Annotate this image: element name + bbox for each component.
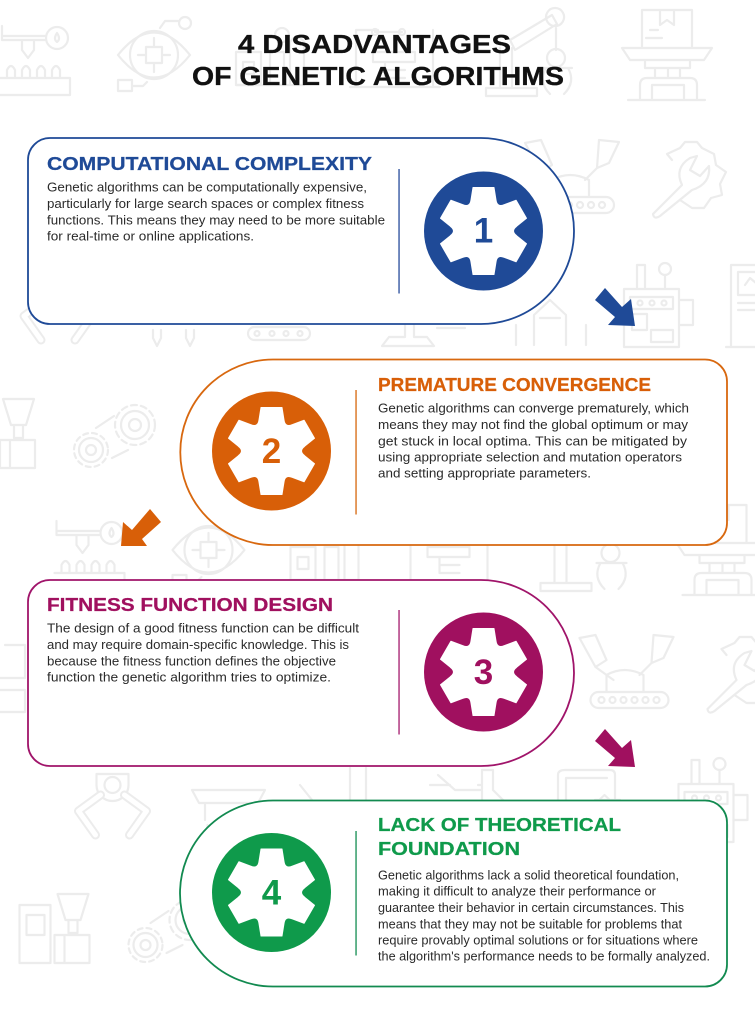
body text: the algorithm's performance needs to be formally analyzed. [378,948,710,964]
icon: numbered gear 3 [424,612,543,732]
body text: functions. This means they may need to be more suitable [47,212,385,228]
panel: lack of theoretical foundation [180,800,727,986]
title: OF GENETIC ALGORITHMS [192,63,564,91]
body text: means that they may not be suitable for problems that [378,916,682,932]
body text: because the fitness function defines the objective [47,654,336,668]
body text [378,868,710,964]
body text: using appropriate selection and mutation operators [378,450,683,464]
arrow: magenta down-right [595,729,635,767]
arrow: orange down-left [121,509,161,546]
body text: The design of a good fitness function can be difficult [47,620,359,636]
body text: for real-time or online applications. [47,228,254,244]
body text [47,180,385,244]
icon: numbered gear 4 [212,833,331,952]
arrow: blue down-right [595,288,635,326]
heading: PREMATURE CONVERGENCE [378,374,651,395]
body text: function the genetic algorithm tries to optimize. [47,670,331,684]
body text: particularly for large search spaces or complex fitness [47,196,365,211]
icon: numbered gear 4: 4 [262,874,282,912]
icon: numbered gear 2: 2 [262,432,281,471]
body text: guarantee their behavior in certain circumstances. This [378,900,684,915]
body text: making it difficult to analyze their performance or [378,884,657,898]
panel: computational complexity [28,138,574,324]
body text: and setting appropriate parameters. [378,466,591,480]
icon: numbered gear 1 [424,172,543,290]
body text: means they may not find the global optimum or may [378,417,689,432]
body text: Genetic algorithms can be computationally expensive, [47,180,367,194]
title [192,31,564,91]
body text: get stuck in local optima. This can be mitigated by [378,434,688,448]
body text [378,400,689,480]
heading: FITNESS FUNCTION DESIGN [47,594,333,615]
panel: fitness function design [28,580,574,766]
icon: numbered gear 3: 3 [474,653,493,692]
heading: FOUNDATION [378,838,520,859]
heading [378,814,621,859]
body text: require provably optimal solutions or for situations where [378,932,698,948]
icon: numbered gear 2 [212,392,331,510]
title: 4 DISADVANTAGES [238,31,511,59]
body text [47,620,359,684]
heading: COMPUTATIONAL COMPLEXITY [47,153,373,174]
body text: and may require domain-specific knowledge. This is [47,637,349,652]
heading: LACK OF THEORETICAL [378,814,621,835]
body text: Genetic algorithms can converge prematurely, which [378,400,689,416]
panel: premature convergence [180,360,727,545]
body text: Genetic algorithms lack a solid theoretical foundation, [378,868,679,882]
icon: numbered gear 1: 1 [474,212,493,250]
